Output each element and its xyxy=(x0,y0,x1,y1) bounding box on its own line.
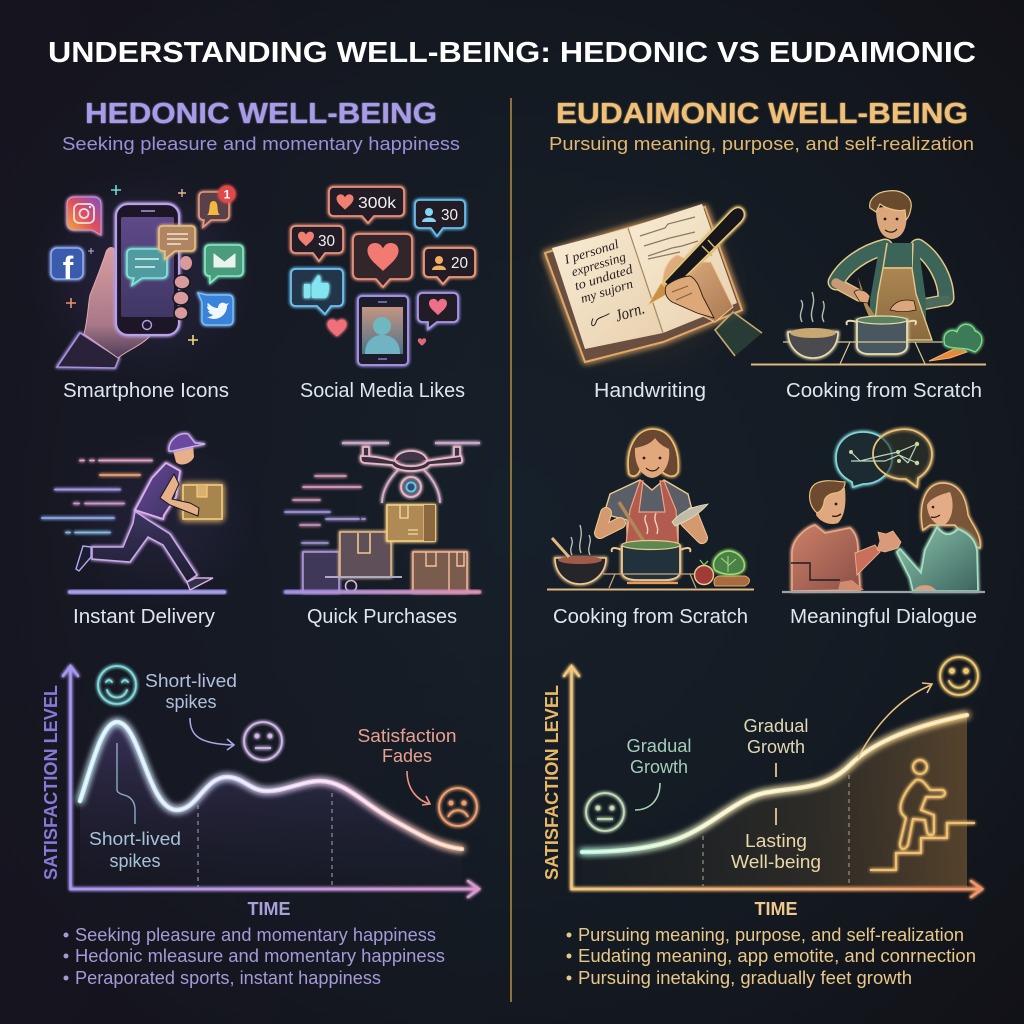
icon: social media likes: 30 xyxy=(318,233,335,250)
title: UNDERSTANDING WELL-BEING: HEDONIC VS EUDAIMONIC xyxy=(48,37,976,69)
axes xyxy=(564,666,982,897)
annotation: gradual growth left: Gradual xyxy=(626,736,692,756)
label: smartphone icons: Smartphone Icons xyxy=(63,380,229,402)
icon: smartphone with app icons: 1 xyxy=(224,188,231,202)
smiley: sad xyxy=(439,788,477,826)
icon: handwriting in a book xyxy=(545,204,762,362)
panel: hedonic well-being xyxy=(41,98,481,988)
arrow: spike to neutral xyxy=(190,718,234,750)
panel: eudaimonic well-being xyxy=(542,98,986,988)
icon: handwriting in a book: my sujorn xyxy=(579,276,635,306)
subtitle: eudaimonic: Pursuing meaning, purpose, and self-realization xyxy=(549,134,974,154)
annotation: gradual growth middle: Gradual xyxy=(744,716,808,736)
axes xyxy=(63,666,479,897)
annotation: gradual growth left: Growth xyxy=(630,757,688,777)
icon: handwriting in a book: to undated xyxy=(573,261,635,293)
icon: man cooking from scratch xyxy=(751,191,986,364)
annotation: short-lived spikes top: Short-lived xyxy=(145,671,237,691)
smiley: neutral xyxy=(586,793,624,831)
chart: hedonic satisfaction over time xyxy=(41,666,479,919)
icon: social media likes xyxy=(291,187,475,365)
icon: handwriting in a book: Jorn. xyxy=(613,298,647,325)
annotation: short-lived spikes top: spikes xyxy=(165,692,217,712)
x axis label: TIME xyxy=(754,899,798,919)
icon: instant delivery runner xyxy=(42,434,226,594)
bullet list: eudaimonic: Pursuing meaning, purpose, and self-realization xyxy=(578,925,964,945)
icon: smartphone with app icons xyxy=(51,185,243,368)
annotation: satisfaction fades: Satisfaction xyxy=(358,726,456,746)
icon: meaningful dialogue xyxy=(782,429,985,592)
smiley: happy xyxy=(98,666,136,704)
annotation: satisfaction fades: Fades xyxy=(382,746,432,766)
annotation: lasting well-being: Lasting xyxy=(745,831,807,851)
connector: gradual growth xyxy=(635,783,660,810)
icon: social media likes: 300k xyxy=(358,195,397,212)
annotation: short-lived spikes bottom: Short-lived xyxy=(89,829,181,849)
bullet list: hedonic: Hedonic mleasure and momentary happiness xyxy=(75,946,445,966)
y axis label: SATISFACTION LEVEL xyxy=(41,685,61,880)
annotation: gradual growth middle: Growth xyxy=(747,737,805,757)
heading: eudaimonic: EUDAIMONIC WELL-BEING xyxy=(556,98,968,130)
label: cooking from scratch (woman): Cooking from Scratch xyxy=(553,606,748,628)
subtitle: hedonic: Seeking pleasure and momentary happiness xyxy=(62,134,460,154)
icon: social media likes: 20 xyxy=(451,255,468,272)
bullet list: hedonic xyxy=(64,925,445,988)
smiley: neutral xyxy=(244,722,282,760)
label: cooking from scratch (man): Cooking from Scratch xyxy=(786,380,982,402)
arrow: fades to sad xyxy=(407,771,430,805)
bullet list: eudaimonic xyxy=(566,925,976,988)
annotation: short-lived spikes bottom: spikes xyxy=(109,851,161,871)
bullet list: eudaimonic: Eudating meaning, app emotite, and conrnection xyxy=(578,946,976,966)
icon: handwriting in a book: I personal xyxy=(561,236,621,267)
icon: social media likes: 30 xyxy=(441,207,458,224)
icon: smartphone with app icons: f xyxy=(63,250,74,286)
icon: handwriting in a book: expressing xyxy=(569,249,628,279)
y axis label: SATISFACTION LEVEL xyxy=(542,685,562,880)
bullet list: hedonic: Seeking pleasure and momentary happiness xyxy=(75,925,436,945)
label: quick purchases: Quick Purchases xyxy=(307,606,457,628)
satisfaction curve xyxy=(80,722,462,849)
icon: drone and quick purchases xyxy=(284,443,481,594)
label: meaningful dialogue: Meaningful Dialogue xyxy=(790,606,977,628)
bullet list: eudaimonic: Pursuing inetaking, gradually feet growth xyxy=(578,968,912,988)
x axis label: TIME xyxy=(248,899,290,919)
label: social media likes: Social Media Likes xyxy=(300,380,465,402)
heading: hedonic: HEDONIC WELL-BEING xyxy=(85,98,437,130)
label: instant delivery: Instant Delivery xyxy=(73,606,215,628)
bullet list: hedonic: Peraporated sports, instant happiness xyxy=(75,968,381,988)
chart: eudaimonic satisfaction over time xyxy=(542,657,982,919)
icon: person climbing stairs xyxy=(870,760,975,870)
icon: woman cooking from scratch xyxy=(547,429,754,590)
annotation: lasting well-being: Well-being xyxy=(731,852,821,872)
growth curve xyxy=(582,715,967,852)
arrow: upward to happy face xyxy=(858,683,932,758)
label: handwriting: Handwriting xyxy=(594,380,706,402)
smiley: happy xyxy=(940,657,978,695)
